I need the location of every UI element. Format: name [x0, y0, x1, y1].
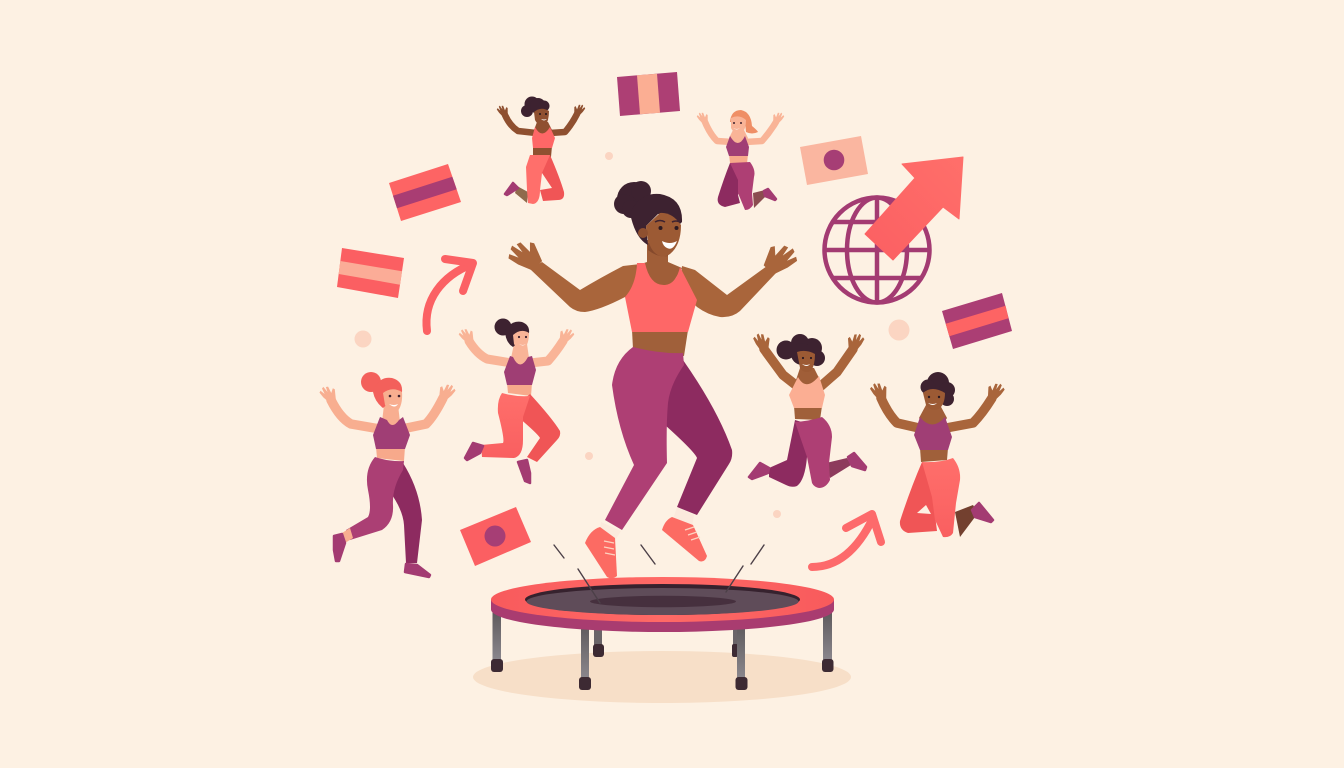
- shin: [515, 186, 528, 203]
- far leg: [518, 394, 560, 462]
- top: [532, 127, 555, 148]
- arms: [881, 398, 992, 428]
- trampoline: [491, 577, 834, 690]
- gap between knees: [917, 505, 931, 514]
- far leg: [390, 463, 422, 563]
- arms: [469, 341, 563, 363]
- hands: [752, 330, 866, 353]
- right arm: [680, 266, 776, 317]
- near leg: [730, 162, 754, 210]
- head: [383, 389, 402, 412]
- hair: [920, 372, 955, 406]
- flag: right, purple and coral: [942, 293, 1012, 349]
- arrow: left curved: [426, 259, 473, 331]
- near leg: [526, 155, 550, 204]
- crop top: [625, 263, 697, 332]
- shoe: [972, 503, 993, 522]
- midriff: [533, 146, 552, 157]
- shin: [753, 190, 767, 208]
- arms: [764, 349, 853, 386]
- flag: top, vertical stripes: [617, 72, 680, 116]
- hair: [361, 372, 402, 408]
- far leg: [900, 462, 945, 533]
- trampoline rim: [491, 600, 834, 632]
- neck and chest: [635, 240, 682, 292]
- figure: woman with coral leggings, far right: [869, 372, 1006, 537]
- figure: woman with peach top, right: [749, 330, 866, 488]
- figure: red-haired woman, left: [318, 372, 457, 577]
- socks: [599, 507, 694, 542]
- near leg: [481, 393, 530, 458]
- flag: lower left, coral with dot: [460, 507, 531, 566]
- far leg: [718, 163, 745, 207]
- decorative dots: [354, 152, 910, 518]
- far leg: [665, 360, 732, 515]
- flag: left, coral and peach: [337, 248, 404, 298]
- midriff: [729, 154, 748, 164]
- head: [797, 351, 815, 372]
- motion lines: [554, 545, 764, 603]
- right shoe: [662, 517, 707, 561]
- left shoe: [585, 527, 617, 578]
- shin: [955, 505, 978, 537]
- top: [914, 417, 952, 450]
- socks: [342, 528, 353, 543]
- figure: dark-haired woman with coral leggings: [457, 318, 576, 483]
- left hand: [505, 233, 548, 275]
- flag: upper left, coral and purple: [389, 164, 461, 221]
- hands: [318, 380, 457, 405]
- midriff: [632, 330, 688, 356]
- far leg: [540, 155, 564, 201]
- shoes: [465, 443, 530, 483]
- neck and chest: [534, 122, 552, 140]
- hands: [869, 379, 1006, 403]
- head: [923, 389, 945, 410]
- hair: [521, 96, 550, 117]
- hands: [457, 325, 576, 346]
- shoe: [505, 183, 518, 195]
- top: [504, 356, 536, 385]
- flag: top right, peach with dot: [800, 136, 868, 185]
- icon: globe: [824, 197, 930, 303]
- midriff: [507, 383, 532, 396]
- shoe: [764, 189, 776, 200]
- figure: small woman, top right: [696, 110, 785, 210]
- midriff: [376, 447, 405, 461]
- trampoline legs: [491, 612, 834, 690]
- arrow: lower right curved: [812, 514, 881, 567]
- shin: [826, 458, 851, 478]
- top: [373, 417, 410, 449]
- arrow: large upward growth arrow: [865, 157, 963, 260]
- neck shadow: [648, 243, 668, 256]
- top: [789, 376, 825, 408]
- figure: central woman jumping: [505, 181, 801, 578]
- left arm: [530, 262, 640, 312]
- hands: [496, 102, 586, 119]
- head: [731, 116, 746, 134]
- figure: small woman, top left: [496, 96, 586, 204]
- top: [726, 136, 749, 156]
- shoes: [749, 453, 866, 479]
- arms: [331, 398, 443, 429]
- midriff: [794, 406, 822, 420]
- midriff: [920, 448, 948, 462]
- near leg: [795, 417, 832, 488]
- hair: [494, 318, 529, 347]
- arms: [705, 122, 776, 142]
- head: [534, 109, 549, 126]
- right hand: [758, 237, 801, 279]
- trampoline shadow: [473, 651, 851, 703]
- face: [638, 213, 681, 257]
- near leg: [346, 457, 404, 540]
- neck and chest: [382, 405, 400, 435]
- arms: [505, 114, 577, 133]
- head: [513, 331, 529, 349]
- far leg: [769, 420, 812, 487]
- near leg: [605, 347, 684, 530]
- neck and chest: [729, 130, 748, 148]
- hair: [730, 110, 758, 134]
- near leg: [922, 458, 960, 537]
- neck and chest: [919, 405, 947, 432]
- hair bun: [614, 181, 651, 218]
- neck and chest: [796, 368, 820, 392]
- neck and chest: [511, 344, 529, 370]
- hair: [776, 334, 825, 366]
- shoes: [334, 534, 430, 577]
- hands: [696, 110, 785, 126]
- hair: [630, 194, 682, 245]
- trampoline mat: [525, 584, 800, 615]
